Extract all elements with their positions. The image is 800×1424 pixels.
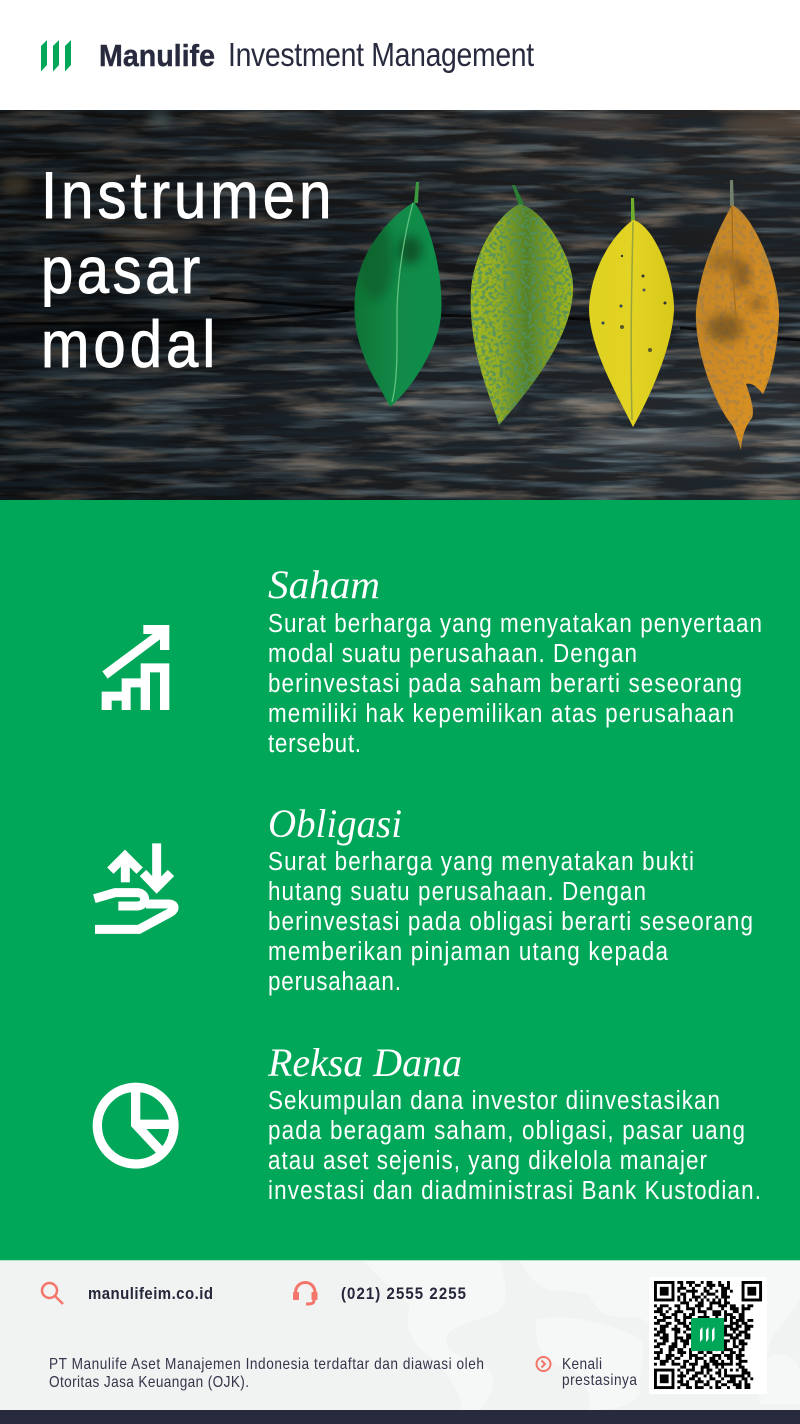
heading: Obligasi: Obligasi bbox=[268, 801, 402, 846]
section: Saham bbox=[268, 562, 762, 758]
link: Kenali prestasinya bbox=[562, 1356, 638, 1389]
title: modal bbox=[41, 309, 215, 382]
text: Saham description: modal suatu perusahaan. Dengan bbox=[268, 640, 637, 668]
panel: footer background with world map bbox=[0, 1260, 800, 1410]
icon: hand with up and down arrows bbox=[94, 843, 174, 929]
bottom bar bbox=[0, 1410, 800, 1424]
leaf: green bbox=[354, 182, 441, 407]
section: Obligasi bbox=[268, 801, 753, 996]
text: Reksa Dana description: investasi dan diadministrasi Bank Kustodian. bbox=[268, 1177, 761, 1205]
icon: pie chart bbox=[97, 1087, 174, 1164]
QR code bbox=[649, 1277, 767, 1394]
icon: search bbox=[42, 1283, 63, 1304]
text: Obligasi description: perusahaan. bbox=[268, 968, 401, 996]
text: regulatory disclaimer bbox=[49, 1356, 484, 1391]
text: Reksa Dana description: Sekumpulan dana investor diinvestasikan bbox=[268, 1087, 720, 1115]
text: Saham description: tersebut. bbox=[268, 730, 361, 758]
icon: Manulife badge in QR bbox=[691, 1318, 724, 1351]
text: Reksa Dana description bbox=[268, 1087, 761, 1205]
title: Instrumen bbox=[41, 160, 331, 233]
logo wordmark: Investment Management bbox=[228, 36, 535, 74]
icon: Manulife logo stripes bbox=[41, 40, 71, 72]
text: Saham description: berinvestasi pada saham berarti seseorang bbox=[268, 670, 742, 698]
header bar bbox=[0, 0, 800, 110]
text: Reksa Dana description: pada beragam saham, obligasi, pasar uang bbox=[268, 1117, 745, 1145]
text: Obligasi description: memberikan pinjaman utang kepada bbox=[268, 938, 669, 966]
text: Reksa Dana description: atau aset sejenis, yang dikelola manajer bbox=[268, 1147, 707, 1175]
text: Obligasi description bbox=[268, 848, 753, 996]
text: Obligasi description: Surat berharga yang menyatakan bukti bbox=[268, 848, 694, 876]
icon: rising bar chart with arrow bbox=[102, 625, 169, 710]
title: pasar bbox=[41, 235, 200, 308]
heading: Saham: Saham bbox=[268, 562, 380, 607]
title bbox=[41, 160, 331, 382]
link: Kenali prestasinya: Kenali bbox=[562, 1356, 602, 1373]
text: regulatory disclaimer: Otoritas Jasa Keuangan (OJK). bbox=[49, 1374, 249, 1391]
icon: headset bbox=[293, 1282, 318, 1304]
website: manulifeim.co.id bbox=[88, 1285, 213, 1303]
text: Obligasi description: berinvestasi pada obligasi berarti seseorang bbox=[268, 908, 753, 936]
logo wordmark: Manulife bbox=[99, 38, 215, 73]
section: Reksa Dana bbox=[267, 1040, 761, 1205]
hero photo: leaves on wood bbox=[0, 110, 800, 500]
leaf: yellow bbox=[589, 198, 674, 427]
text: Saham description: memiliki hak kepemilikan atas perusahaan bbox=[268, 700, 734, 728]
text: Obligasi description: hutang suatu perusahaan. Dengan bbox=[268, 878, 646, 906]
leaf: orange bbox=[694, 180, 782, 450]
text: Saham description bbox=[268, 610, 762, 758]
icon: circled chevron bbox=[536, 1357, 550, 1371]
link: Kenali prestasinya: prestasinya bbox=[562, 1372, 638, 1389]
world map silhouette bbox=[364, 1261, 800, 1410]
text: Saham description: Surat berharga yang menyatakan penyertaan bbox=[268, 610, 762, 638]
panel: green content background bbox=[0, 500, 800, 1260]
phone number: (021) 2555 2255 bbox=[341, 1285, 466, 1303]
leaf: yellow-green bbox=[468, 185, 576, 427]
heading: Reksa Dana: Reksa Dana bbox=[267, 1040, 462, 1085]
text: regulatory disclaimer: PT Manulife Aset Manajemen Indonesia terdaftar dan diawasi oleh bbox=[49, 1356, 484, 1373]
